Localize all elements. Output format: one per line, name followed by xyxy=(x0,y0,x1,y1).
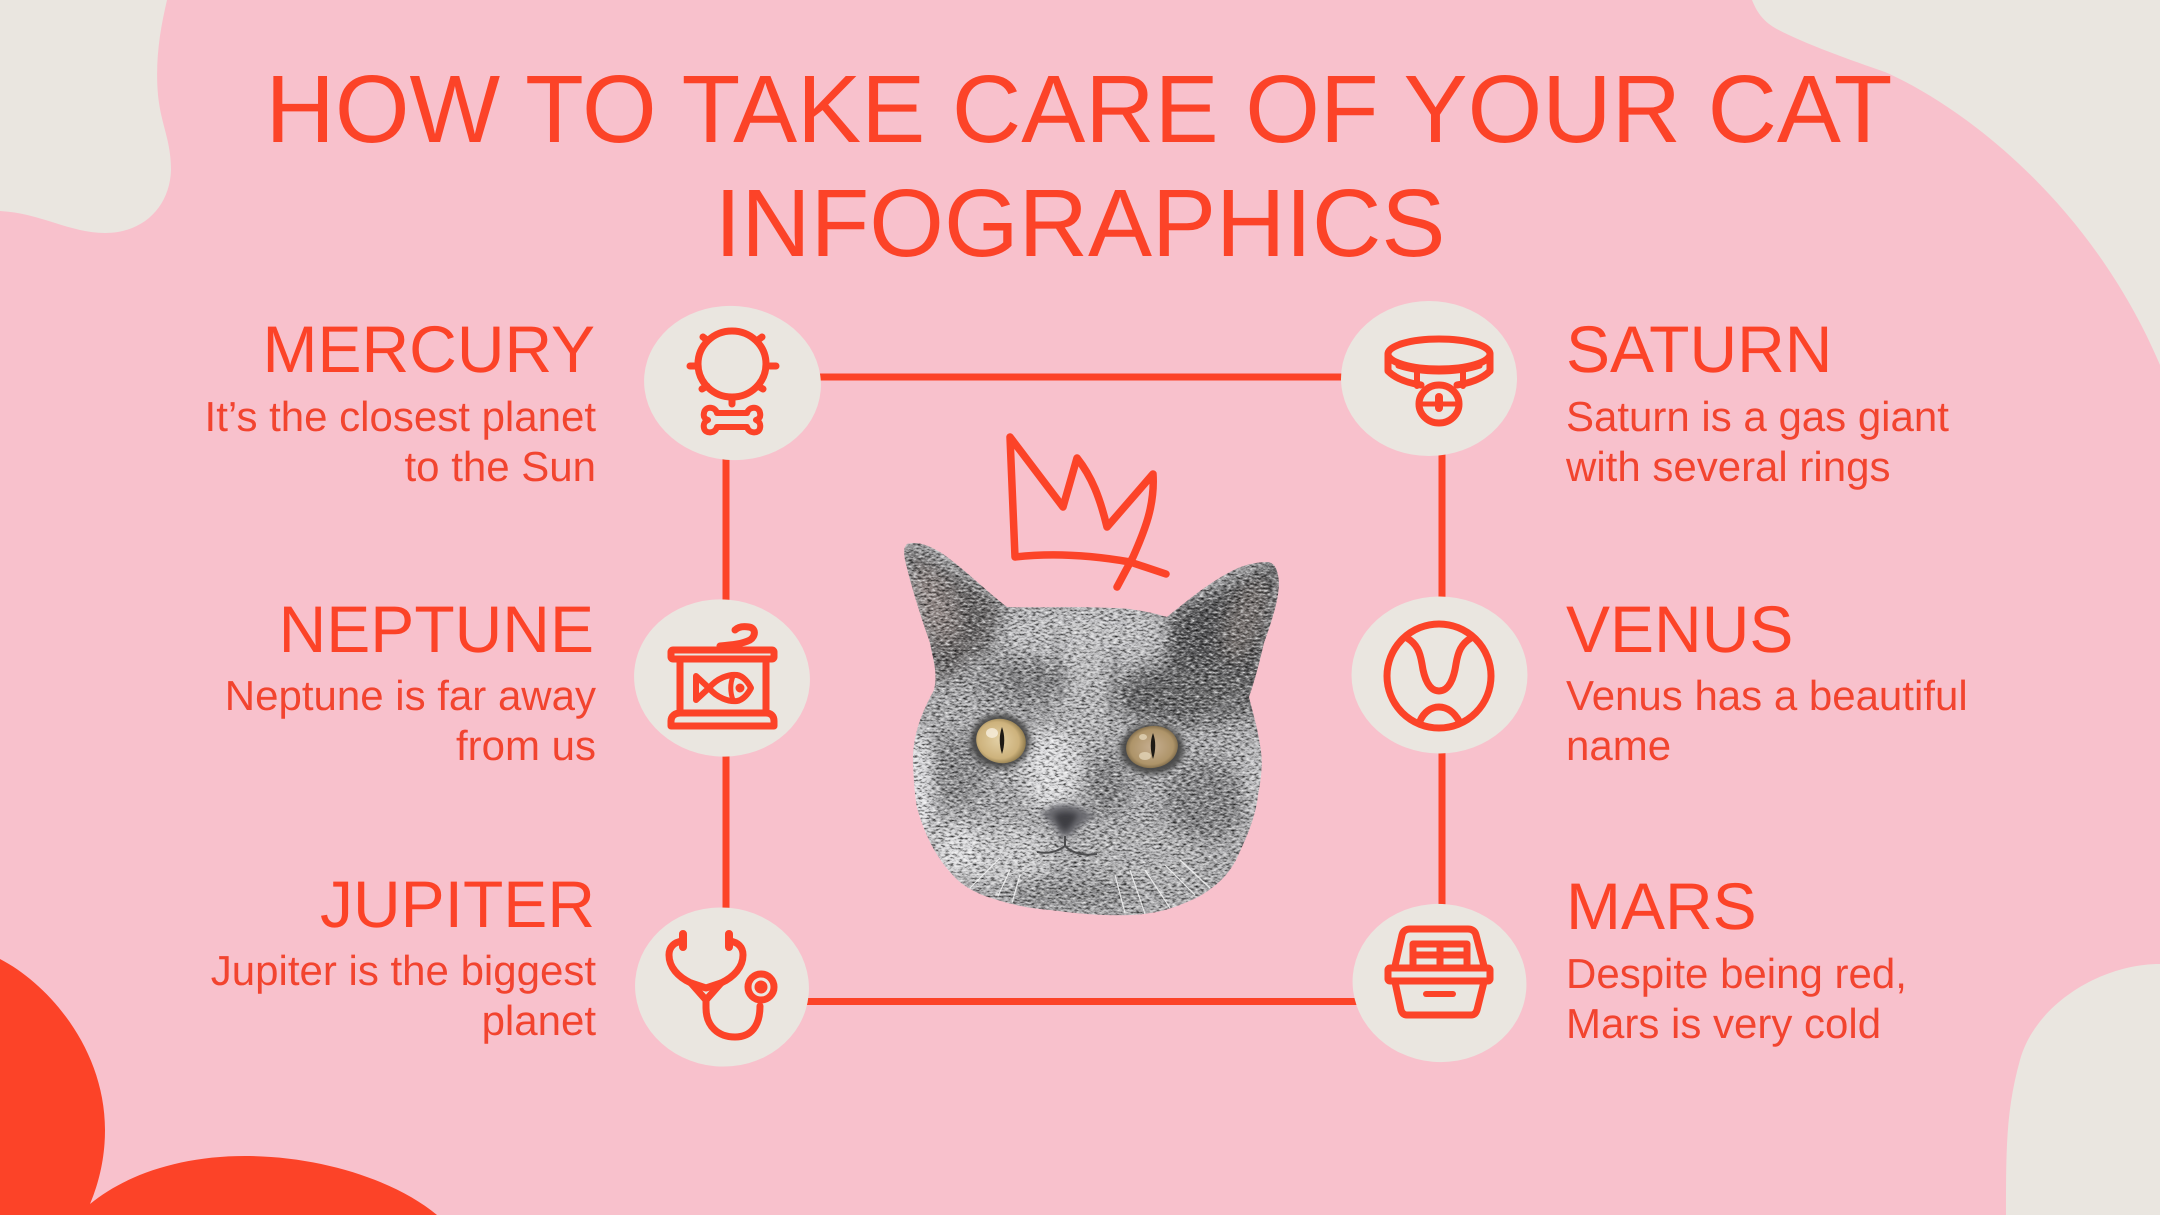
item: Mars xyxy=(1346,869,1907,1069)
icon: collar xyxy=(1388,339,1490,423)
description: Venus: name xyxy=(1566,722,1671,769)
description: Mercury xyxy=(205,393,596,490)
icon circle: Jupiter xyxy=(628,900,816,1074)
icon circle: Mercury xyxy=(638,299,827,467)
heading: Neptune: NEPTUNE xyxy=(279,592,594,666)
icon circle: Mars xyxy=(1346,897,1533,1069)
description: Neptune: Neptune is far away xyxy=(225,672,596,719)
heading: Mercury: MERCURY xyxy=(263,312,595,386)
icon: pet carrier xyxy=(1388,929,1490,1015)
description: Mercury: It’s the closest planet xyxy=(205,393,596,440)
description: Jupiter: planet xyxy=(482,997,596,1044)
eye: right xyxy=(1123,723,1181,771)
heading: Saturn: SATURN xyxy=(1566,312,1832,386)
item: Neptune xyxy=(225,592,817,769)
item: Saturn xyxy=(1341,301,1949,490)
description: Saturn: with several rings xyxy=(1565,443,1890,490)
decorative blob: bottom right xyxy=(2006,964,2160,1215)
description: Mercury: to the Sun xyxy=(405,443,596,490)
cat head xyxy=(904,543,1279,916)
icon: food bowl with bone xyxy=(690,331,776,432)
heading: Venus: VENUS xyxy=(1566,592,1793,666)
item: Venus xyxy=(1352,592,1968,769)
icon: fish can xyxy=(671,627,774,726)
description: Venus xyxy=(1566,672,1968,769)
title: INFOGRAPHICS xyxy=(715,170,1445,277)
description: Jupiter xyxy=(211,947,596,1044)
description: Mars: Despite being red, xyxy=(1566,950,1907,997)
description: Saturn xyxy=(1565,393,1949,490)
eye: left xyxy=(971,713,1031,769)
shading: face xyxy=(923,734,987,806)
shading: right ear xyxy=(1158,562,1279,686)
crown doodle xyxy=(1010,437,1166,587)
decorative blob: bottom left xyxy=(0,959,437,1215)
shading: forehead xyxy=(1005,607,1165,663)
item: Mercury xyxy=(205,299,827,490)
description: Saturn: Saturn is a gas giant xyxy=(1566,393,1949,440)
description: Jupiter: Jupiter is the biggest xyxy=(211,947,596,994)
description: Mars xyxy=(1566,950,1907,1047)
description: Venus: Venus has a beautiful xyxy=(1566,672,1968,719)
nose xyxy=(1037,804,1097,855)
title xyxy=(266,56,1892,277)
icon circle: Venus xyxy=(1352,596,1528,754)
description: Neptune xyxy=(225,672,596,769)
title: HOW TO TAKE CARE OF YOUR CAT xyxy=(266,56,1892,163)
item: Jupiter xyxy=(211,867,816,1074)
fur streaks xyxy=(965,620,1240,720)
icon: ball xyxy=(1387,624,1491,728)
whiskers xyxy=(970,858,1210,914)
icon circle: Neptune xyxy=(627,592,817,764)
connector frame xyxy=(722,374,1446,1005)
shading: eye sockets xyxy=(970,714,1184,774)
icon: stethoscope xyxy=(669,934,774,1037)
heading: Jupiter: JUPITER xyxy=(320,867,595,941)
description: Mars: Mars is very cold xyxy=(1566,1000,1881,1047)
icon circle: Saturn xyxy=(1341,301,1517,456)
description: Neptune: from us xyxy=(456,722,596,769)
shading: left ear xyxy=(900,540,1005,690)
heading: Mars: MARS xyxy=(1566,869,1757,943)
decorative blob: top left xyxy=(0,0,171,233)
decorative blob: top right xyxy=(1752,0,2160,365)
